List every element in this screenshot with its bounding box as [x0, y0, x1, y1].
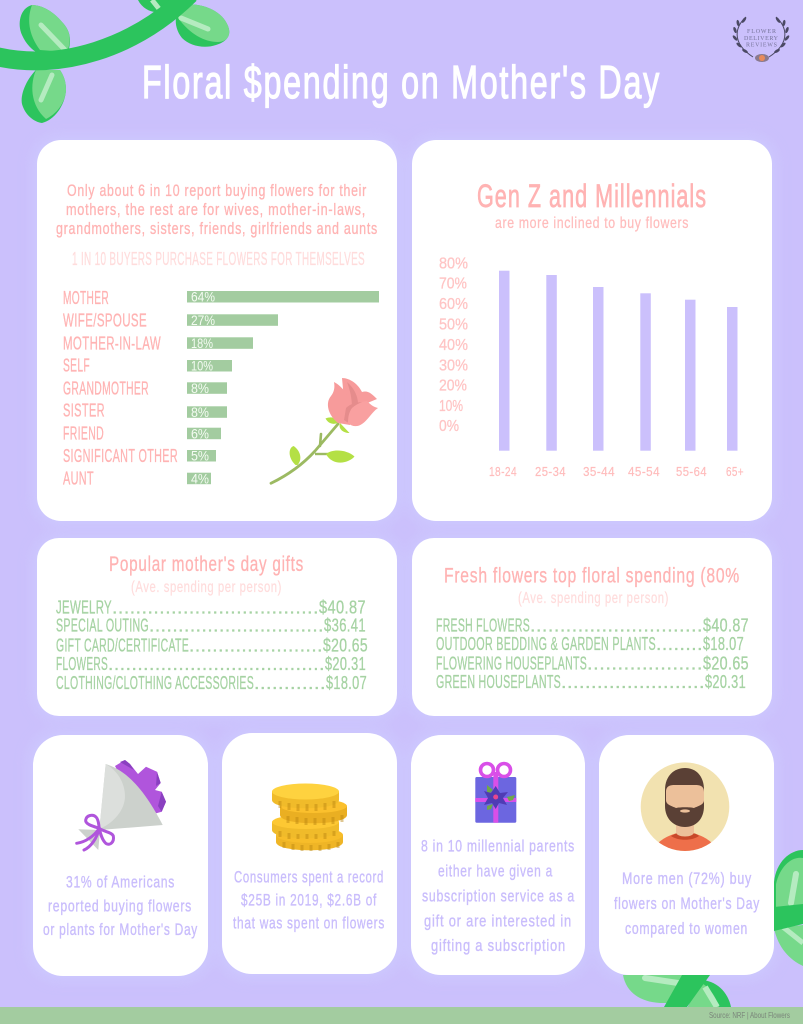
subheading: are more inclined to buy flowers	[495, 215, 689, 232]
list: floral spending: FRESH FLOWERS	[436, 616, 530, 636]
bar chart: recipients	[63, 288, 379, 488]
text: Consumers spent a record	[234, 868, 384, 887]
text: either have given a	[438, 862, 553, 881]
list: floral spending: OUTDOOR BEDDING & GARDEN PLANTS	[436, 634, 656, 654]
text: More men (72%) buy	[622, 869, 752, 888]
bar chart: by age: 10%	[439, 398, 463, 415]
list: floral spending: $40.87	[703, 616, 749, 636]
bar chart: by age: 30%	[439, 357, 468, 374]
text	[421, 837, 575, 955]
bar chart: recipients: 8%	[191, 380, 209, 396]
text: $25B in 2019, $2.6B of	[241, 891, 377, 910]
panel: popular mother's day gifts	[37, 538, 397, 716]
panel: 31% of Americans	[33, 735, 208, 976]
bar chart: by age: 70%	[439, 276, 467, 293]
bar chart: recipients: MOTHER	[63, 288, 109, 308]
bar chart: recipients: SIGNIFICANT OTHER	[63, 446, 178, 466]
bar chart: recipients: 8%	[191, 404, 209, 420]
list: floral spending: $20.65	[703, 653, 749, 673]
text: gift or are interested in	[424, 912, 572, 931]
list: gift spending: $40.87	[319, 597, 366, 617]
icon: rose	[271, 378, 378, 483]
bar chart: recipients: 5%	[191, 448, 209, 464]
bar chart: by age: 18-24	[489, 464, 517, 479]
list: floral spending: ...................	[587, 653, 703, 673]
panel: who buyers purchase flowers for	[37, 140, 397, 521]
list: gift spending: $36.41	[324, 616, 366, 636]
bar chart: by age: 0%	[439, 418, 459, 435]
bar chart: recipients: FRIEND	[63, 423, 104, 443]
list: gift spending: JEWELRY	[56, 597, 112, 617]
list: gift spending: GIFT CARD/CERTIFICATE	[56, 635, 189, 655]
text: reported buying flowers	[48, 897, 192, 916]
bar chart: by age: 65+	[726, 464, 744, 479]
text: 31% of Americans	[66, 872, 175, 891]
bar chart: recipients: AUNT	[63, 468, 94, 488]
list: gift spending: $18.07	[326, 673, 367, 693]
bar chart: by age: 40%	[439, 337, 468, 354]
bar chart: recipients: 64%	[191, 289, 215, 305]
bar chart: by age: 45-54	[628, 464, 660, 479]
list: floral spending: $20.31	[705, 672, 746, 692]
list: floral spending: .............................	[530, 616, 703, 636]
list: gift spending: $20.31	[325, 654, 366, 674]
panel: consumers spent a record	[222, 733, 397, 974]
panel: fresh flowers top floral spending	[412, 538, 772, 716]
intro text: grandmothers, sisters, friends, girlfriends and aunts	[56, 219, 378, 238]
list: floral spending: GREEN HOUSEPLANTS	[436, 672, 561, 692]
list: gift spending: FLOWERS	[56, 654, 108, 674]
icon: bouquet	[77, 760, 166, 850]
bar chart: by age: 20%	[439, 378, 467, 395]
text: subscription service as a	[422, 887, 575, 906]
list: gift spending: .......................	[189, 635, 323, 655]
bar chart: recipients: 10%	[191, 358, 213, 374]
decoration: top-left vine with leaves	[0, 0, 229, 123]
subheading: (Ave. spending per person)	[518, 590, 669, 607]
text: 8 in 10 millennial parents	[421, 837, 575, 856]
panel: Gen Z and Millennials	[412, 140, 772, 521]
bar chart: recipients: 18%	[191, 335, 213, 351]
decoration: right-side leaves	[774, 850, 803, 966]
intro text	[56, 181, 378, 238]
list: floral spending: ........................	[561, 672, 705, 692]
icon: gift box	[475, 764, 516, 823]
list: floral spending: ........	[656, 634, 703, 654]
list: gift spending: ..............................	[149, 616, 324, 636]
bar chart: by age: 60%	[439, 296, 468, 313]
list: gift spending: .....................................	[108, 654, 325, 674]
bar chart: by age: 55-64	[676, 464, 707, 479]
footer bar with source	[0, 1007, 803, 1024]
list: gift spending: ............	[254, 673, 326, 693]
bar chart: recipients: WIFE/SPOUSE	[63, 311, 147, 331]
intro text: Only about 6 in 10 report buying flowers for their	[67, 181, 367, 200]
logo: Flower Delivery Reviews: DELIVERY	[744, 36, 779, 42]
list: gift spending: ...................................	[112, 597, 319, 617]
bar chart: recipients: 4%	[191, 470, 209, 486]
bar chart: recipients: 27%	[191, 312, 215, 328]
list: gift spending	[56, 597, 368, 693]
list: gift spending: CLOTHING/CLOTHING ACCESSORIES	[56, 673, 254, 693]
bar chart: recipients: 6%	[191, 425, 209, 441]
logo: Flower Delivery Reviews: FLOWER	[747, 29, 776, 35]
bar chart: by age	[439, 255, 744, 479]
bar chart: recipients: MOTHER-IN-LAW	[63, 333, 161, 353]
intro text: mothers, the rest are for wives, mother-in-laws,	[66, 200, 366, 219]
bar chart: recipients: SISTER	[63, 401, 105, 421]
heading: Popular mother's day gifts	[109, 553, 304, 576]
text	[233, 868, 385, 932]
bar chart: by age: 80%	[439, 255, 468, 272]
panel: more men buy flowers	[599, 735, 774, 975]
list: floral spending: FLOWERING HOUSEPLANTS	[436, 653, 587, 673]
text	[614, 869, 760, 938]
bar chart: by age: 25-34	[535, 464, 566, 479]
icon: coin stack	[272, 784, 347, 851]
bar chart: recipients: GRANDMOTHER	[63, 378, 149, 398]
logo: Flower Delivery Reviews: REVIEWS	[746, 42, 777, 48]
text: or plants for Mother's Day	[43, 920, 198, 939]
bar chart: recipients: SELF	[63, 356, 90, 376]
icon: bearded man	[641, 762, 729, 860]
text: compared to women	[625, 919, 748, 938]
text: gifting a subscription	[431, 936, 566, 955]
decoration: bottom leaves	[623, 975, 731, 1007]
list: floral spending: $18.07	[703, 634, 744, 654]
list: floral spending	[436, 616, 749, 692]
panel: millennial parents	[411, 735, 585, 975]
text: that was spent on flowers	[233, 913, 385, 932]
logo: Flower Delivery Reviews	[732, 16, 790, 62]
subheading: 1 IN 10 BUYERS PURCHASE FLOWERS FOR THEMSELVES	[72, 249, 365, 269]
subheading: (Ave. spending per person)	[131, 579, 282, 596]
bar chart: by age: 50%	[439, 316, 468, 333]
list: gift spending: SPECIAL OUTING	[56, 616, 149, 636]
bar chart: by age: 35-44	[583, 464, 615, 479]
text	[43, 872, 198, 939]
list: gift spending: $20.65	[323, 635, 368, 655]
